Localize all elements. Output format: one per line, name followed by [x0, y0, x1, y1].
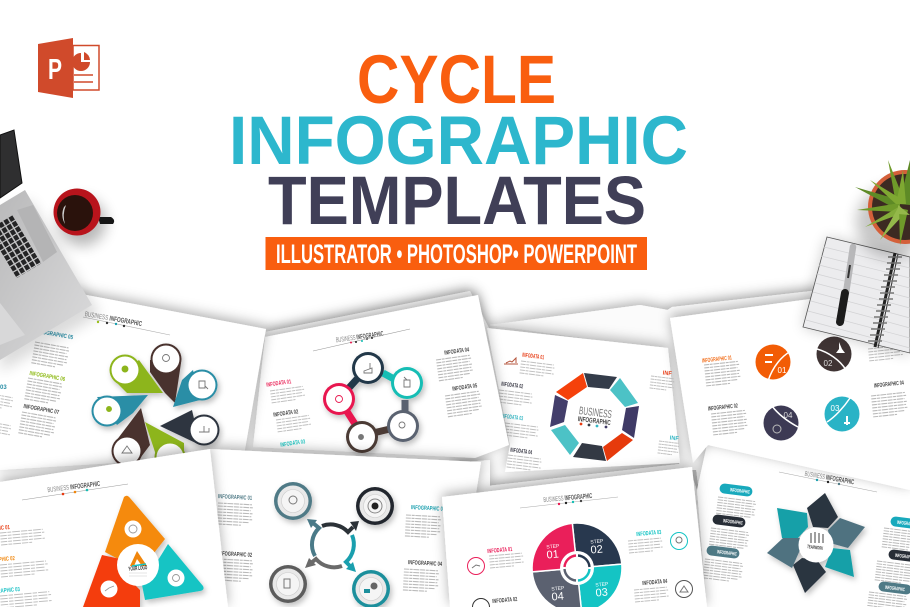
text block [498, 390, 533, 406]
labels and text: INFODATA 01 [266, 379, 292, 389]
circle 03 [824, 396, 860, 432]
circle 04 [764, 406, 798, 440]
panel: pinwheel card [0, 290, 266, 472]
step labels: 04 [551, 591, 564, 604]
step labels: 02 [590, 544, 603, 557]
pill labels [703, 483, 910, 607]
panel: stacked sheets behind the cards [265, 290, 830, 510]
triangle chart [83, 496, 204, 607]
panel: linked circles card [253, 295, 509, 458]
labels and text [217, 494, 446, 592]
pie chart [532, 523, 622, 607]
text block [658, 441, 679, 455]
logo [128, 551, 148, 576]
step labels: STEP [551, 585, 565, 593]
title line: infographic: INFOGRAPHIC [229, 102, 688, 179]
labels and text [487, 530, 669, 605]
labels and text: INFODATA 02 [273, 409, 299, 419]
icon: powerpoint logo [38, 38, 99, 98]
title line: templates: TEMPLATES [268, 162, 646, 239]
text block [650, 376, 675, 391]
circle 04: 04 [784, 411, 793, 420]
icon circles [100, 520, 184, 598]
circle 03: 03 [831, 404, 840, 413]
step labels: 03 [595, 587, 608, 600]
label: infodata 03: INFODATA 03 [501, 414, 524, 422]
circle 02 [816, 336, 852, 372]
linked circle cycle [323, 352, 423, 453]
coffee cup [54, 188, 114, 246]
labels and text: INFODATA 05 [452, 383, 478, 393]
circle 02: 02 [824, 359, 833, 368]
laptop base [0, 190, 92, 360]
labels and text: INFOGRAPHIC 02 [708, 403, 739, 413]
circle 01 [756, 344, 791, 381]
cup handle [98, 217, 114, 224]
heading [779, 471, 877, 492]
panel: flower card [697, 440, 910, 607]
flower chart [767, 493, 865, 593]
heading [520, 493, 618, 508]
heading: BUSINESS INFOGRAPHIC [47, 481, 101, 494]
label: infodata 01: INFODATA 01 [522, 353, 545, 361]
icons [336, 363, 410, 440]
labels and text: INFOGRAPHIC 01 [218, 494, 253, 502]
labels and text: INFOGRAPHIC 01 [702, 355, 733, 365]
pill labels: INFOGRAPHIC [717, 549, 737, 558]
notebook [803, 237, 910, 355]
icon: powerpoint logo: P [48, 54, 62, 86]
heading: BUSINESS INFOGRAPHIC [543, 493, 593, 504]
labels and text: INFOGRAPHIC 04 [408, 560, 443, 568]
title [229, 41, 688, 239]
labels and text: INFODATA 03 [636, 530, 662, 538]
label: infodata 02: INFODATA 02 [501, 382, 524, 390]
icon: small chart [504, 358, 518, 364]
heading: BUSINESS INFOGRAPHIC [336, 331, 384, 344]
step labels: STEP [595, 581, 609, 589]
panel: triangle card [0, 449, 228, 607]
panel: octagon cycle card [487, 328, 680, 472]
circle: hand [352, 570, 390, 607]
flower center text [807, 532, 824, 552]
pill labels: INFOGRAPHIC [723, 518, 743, 527]
icons [106, 354, 209, 453]
text block [507, 455, 542, 471]
labels and text: INFODATA 02 [492, 597, 518, 605]
labels and text: INFOGRAPHIC 05 [35, 329, 74, 341]
text block [504, 423, 539, 439]
circle 01: 01 [778, 366, 787, 375]
flower center text: TEAMWORK [807, 544, 824, 552]
heading: BUSINESS INFOGRAPHIC [804, 471, 854, 486]
trackpad [0, 303, 25, 345]
step labels: STEP [590, 538, 604, 546]
banner: ILLUSTRATOR • PHOTOSHOP• POWERPOINT [276, 239, 637, 269]
step labels: 01 [546, 549, 559, 562]
heading [22, 481, 128, 500]
arrow ring [305, 519, 359, 572]
step labels: STEP [546, 543, 560, 551]
labels and text: INFOGRAPHIC 07 [23, 404, 60, 416]
labels and text: INFODATA 01 [487, 547, 513, 555]
labels and text: INFOGRAPHIC 03 [411, 505, 446, 513]
laptop [0, 130, 100, 372]
plant leaves [855, 160, 910, 245]
label: infodata 04: INFODATA 04 [510, 448, 533, 456]
laptop screen [0, 130, 22, 198]
labels and text: INFODATA 04 [642, 579, 668, 587]
heading [313, 329, 410, 351]
icon circles [468, 532, 692, 607]
labels and text [702, 345, 908, 435]
center text: business infographic: BUSINESS [578, 405, 612, 421]
circle: chess piece [269, 565, 307, 603]
center text: business infographic: INFOGRAPHIC [577, 416, 611, 427]
title line: cycle: CYCLE [357, 41, 556, 118]
pill labels: INFOGRAPHIC [730, 487, 750, 496]
panel: four step pie card [442, 467, 707, 607]
circle: gear head [274, 482, 312, 520]
labels and text: 03 [0, 385, 7, 391]
panel: four numbered circles card [670, 299, 910, 490]
label: infodata right red: INF [662, 370, 672, 378]
labels and text: INFODATA 03 [280, 439, 306, 449]
text block [520, 361, 555, 377]
labels and text [0, 329, 74, 439]
marker pen [840, 247, 853, 322]
spiral binding [868, 253, 902, 348]
labels and text: INFODATA 04 [444, 347, 470, 357]
labels and text [0, 525, 52, 607]
label: infodata right teal: INF [669, 435, 679, 443]
logo: YOUR LOGO [128, 565, 148, 573]
keyboard [0, 217, 39, 277]
pinwheel chart [92, 344, 220, 472]
panel: arrow cycle card [210, 449, 481, 607]
labels and text: INFOGRAPHIC 02 [218, 551, 253, 559]
heading: BUSINESS INFOGRAPHIC [84, 311, 142, 328]
octagon ring chart [550, 373, 639, 461]
center text: business infographic [577, 405, 612, 428]
labels and text: INFOGRAPHIC 06 [29, 371, 66, 383]
banner [266, 237, 647, 270]
step labels [546, 538, 609, 604]
circle: target [356, 487, 394, 525]
potted plant [855, 160, 910, 258]
labels and text [266, 347, 483, 449]
